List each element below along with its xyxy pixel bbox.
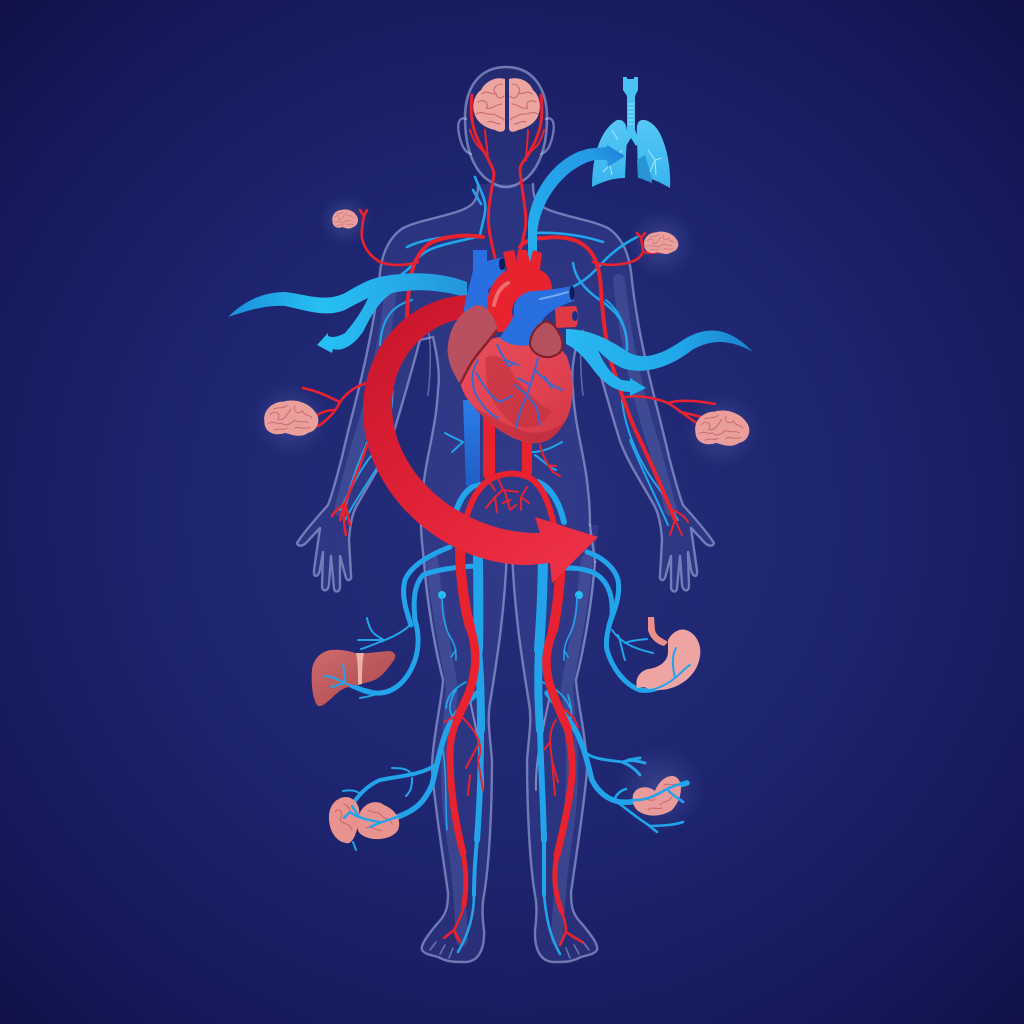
liver <box>312 650 395 706</box>
human body outline <box>297 67 714 962</box>
blue band left with arrow <box>228 273 467 353</box>
veins: blue network <box>324 177 690 954</box>
right leg main vein <box>539 545 543 650</box>
blue arrow to lungs <box>528 145 625 262</box>
right hand artery branches <box>670 510 688 535</box>
organ glows <box>253 194 760 834</box>
right lung <box>637 120 670 188</box>
pulmonary artery <box>500 286 574 346</box>
heart <box>448 250 578 443</box>
left leg main vein <box>473 545 483 650</box>
iliac arch <box>462 474 554 545</box>
superior vena cava <box>463 250 505 320</box>
main brain <box>473 78 540 132</box>
head <box>465 67 547 187</box>
left leg artery <box>460 545 470 627</box>
neck and shoulder veins <box>402 177 485 274</box>
right atrium <box>530 322 562 357</box>
small brain top left <box>332 209 358 229</box>
pelvic blue arc <box>453 482 564 525</box>
branch to left brain <box>303 382 372 426</box>
ventricles <box>460 337 573 443</box>
vein to stomach <box>567 568 690 690</box>
vein to liver <box>348 566 480 693</box>
bronchi <box>603 130 662 175</box>
right leg artery <box>553 545 561 630</box>
abdominal twig right <box>540 445 560 476</box>
right hemisphere <box>509 78 540 132</box>
arm veins right <box>606 300 678 525</box>
thin thigh veins <box>438 591 446 599</box>
small brain top right <box>644 232 678 254</box>
left lung <box>592 120 627 187</box>
brain mid left <box>264 400 318 436</box>
subclavian right and long arm artery <box>520 237 675 520</box>
arm veins left <box>340 300 412 520</box>
right lower vein to kidney organ <box>547 693 687 802</box>
coronary vessels <box>472 345 562 428</box>
branch to right brain <box>626 396 730 426</box>
arteries: red network <box>303 95 730 945</box>
ears <box>458 118 554 154</box>
upper left twig <box>358 618 410 649</box>
hip connectors <box>421 525 595 562</box>
torso and arm left <box>297 184 506 591</box>
subclavian left with arm branch <box>407 236 483 320</box>
brain mid right <box>695 410 749 446</box>
knee branches <box>446 682 571 720</box>
left forearm artery <box>332 445 367 535</box>
aorta arch <box>487 250 552 332</box>
lower left intestine <box>329 797 400 843</box>
leg right <box>510 525 598 962</box>
trachea <box>622 77 640 146</box>
torso and arm right <box>506 184 714 591</box>
leg left <box>421 525 510 962</box>
mesenteric branches <box>486 478 529 512</box>
carotid left <box>471 95 495 258</box>
central abdominal branches <box>445 433 562 470</box>
stomach <box>636 617 700 690</box>
big red circular arrow <box>363 295 598 583</box>
below heart descending aorta <box>483 410 495 474</box>
blue band right with arrow <box>566 329 753 396</box>
lower vena cava <box>463 400 480 486</box>
lungs <box>592 77 670 188</box>
carotid right <box>518 95 542 258</box>
right red pulmonary stub <box>555 306 578 328</box>
left hemisphere <box>473 78 505 132</box>
left atrium <box>448 305 497 384</box>
lower right organ <box>632 776 687 816</box>
left lower vein to intestine <box>370 693 477 827</box>
